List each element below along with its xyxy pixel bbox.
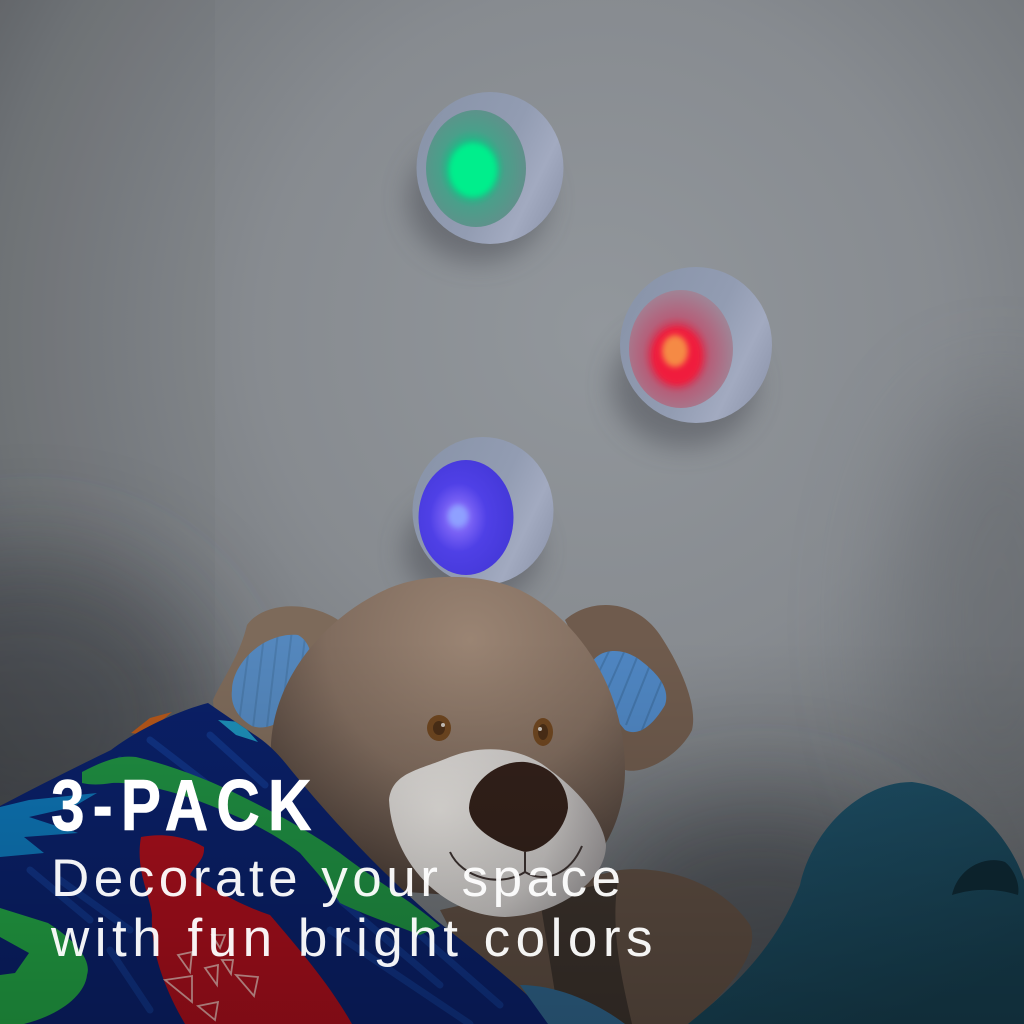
icon: red push light — [612, 267, 772, 447]
green loop — [0, 908, 88, 1024]
bear right ear — [565, 605, 693, 771]
bear eye left — [427, 715, 451, 741]
light blue cloth — [520, 985, 625, 1024]
bottom shading — [0, 640, 1024, 1024]
bear eye right — [533, 718, 553, 746]
bear nose — [469, 762, 568, 852]
bear body — [440, 869, 752, 1024]
description line two: with fun bright colors — [51, 909, 658, 968]
patterned blanket — [0, 703, 548, 1024]
caption — [50, 766, 658, 968]
icon: green push light — [408, 92, 564, 262]
bear muzzle — [389, 749, 606, 917]
teddy bear — [213, 577, 752, 1024]
bear paw shadow — [540, 880, 632, 1024]
triangles — [165, 935, 258, 1020]
heading: 3-PACK — [51, 766, 320, 846]
description line one: Decorate your space — [51, 849, 626, 908]
orange blanket corner — [131, 712, 172, 735]
bear head — [271, 577, 625, 900]
bear mouth — [450, 846, 582, 880]
blue shape — [0, 793, 97, 857]
teal blanket — [688, 782, 1024, 1024]
green band — [82, 757, 440, 935]
bear left ear — [213, 606, 338, 747]
icon: blue push light — [404, 437, 554, 605]
red shape — [140, 835, 352, 1024]
